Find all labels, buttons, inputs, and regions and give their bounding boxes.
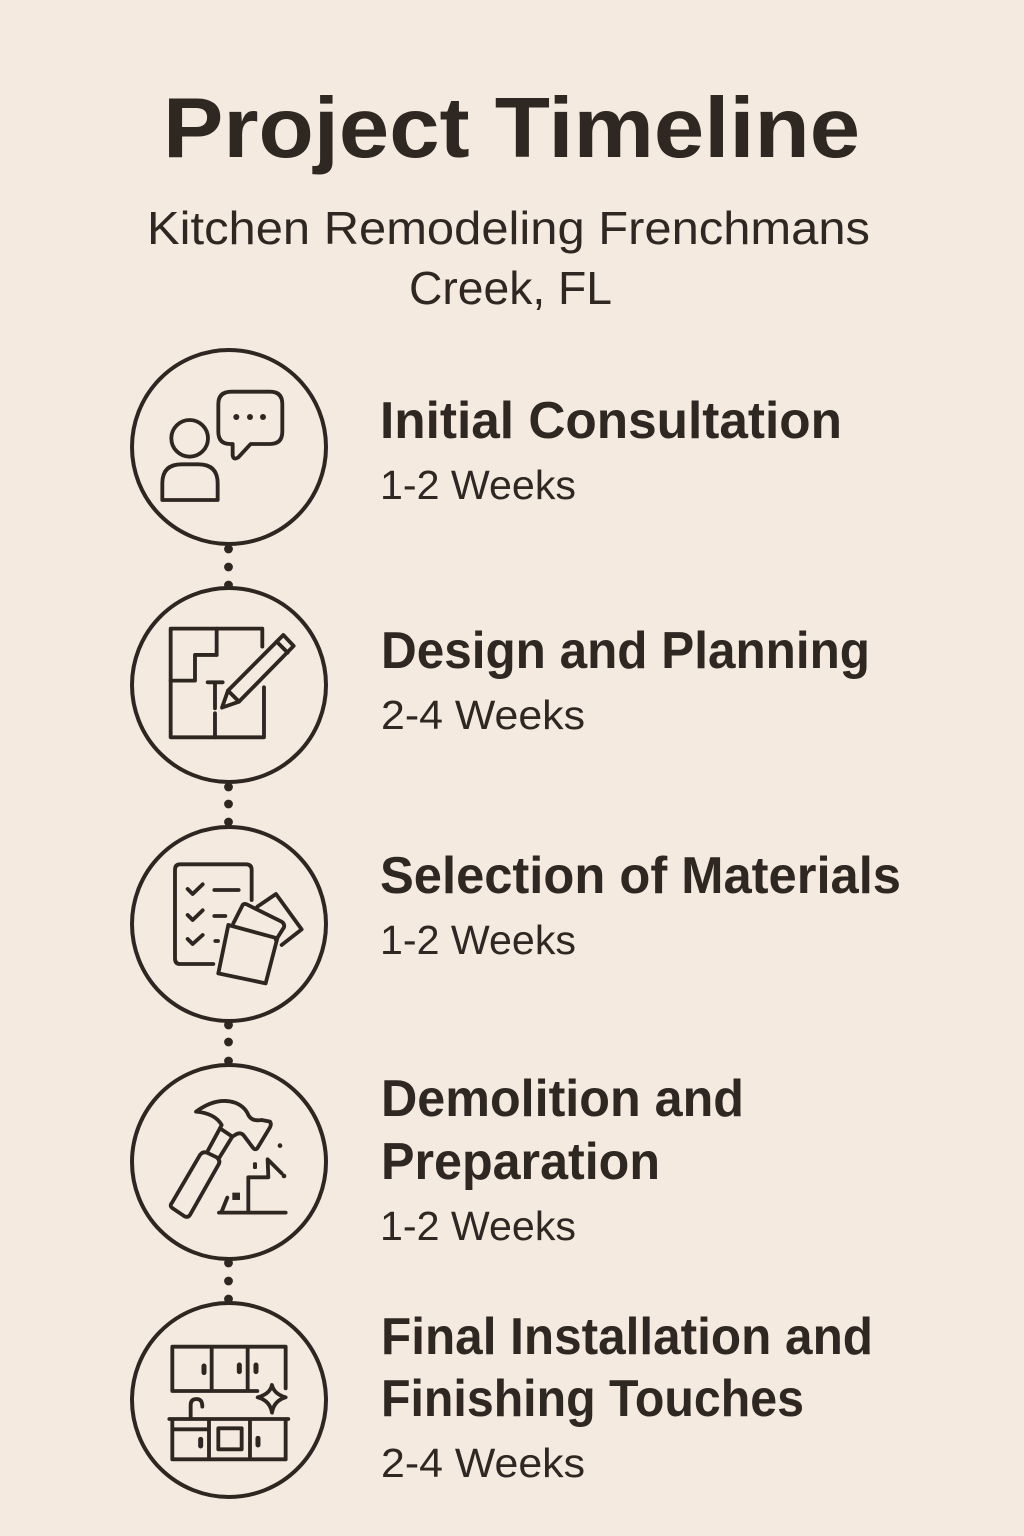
heading: selection of materials: Selection of Materials (380, 847, 901, 905)
subtitle (147, 202, 870, 314)
duration: 2-4 weeks: 2-4 Weeks (381, 1440, 585, 1486)
heading: demolition and preparation: Preparation (381, 1133, 660, 1191)
duration: 1-2 weeks: 1-2 Weeks (380, 917, 576, 963)
step 5: final installation and finishing touches (132, 1303, 873, 1497)
icon: finished kitchen with sparkle (132, 1303, 326, 1497)
icon: floor plan with pencil (132, 588, 326, 782)
duration: 1-2 weeks: 1-2 Weeks (380, 462, 576, 508)
subtitle: Creek, FL (409, 262, 612, 314)
step 1: initial consultation (132, 350, 842, 544)
heading: final installation and finishing touches: Finishing Touches (381, 1370, 804, 1428)
heading: design and planning: Design and Planning (381, 622, 870, 680)
heading: demolition and preparation (381, 1070, 744, 1191)
step 2: design and planning (132, 588, 870, 782)
step 3: selection of materials (132, 827, 901, 1021)
heading: demolition and preparation: Demolition and (381, 1070, 744, 1128)
heading: final installation and finishing touches: Final Installation and (381, 1308, 873, 1366)
icon: hammer and rubble (132, 1065, 326, 1259)
duration: 1-2 weeks: 1-2 Weeks (380, 1203, 576, 1249)
icon: person with speech bubble (132, 350, 326, 544)
timeline connector dots (224, 545, 233, 1303)
heading: final installation and finishing touches (381, 1308, 873, 1428)
title: Project Timeline (163, 81, 860, 176)
step 4: demolition and preparation (132, 1065, 744, 1259)
icon: checklist with material swatches (132, 827, 326, 1021)
duration: 2-4 weeks: 2-4 Weeks (381, 692, 585, 738)
subtitle: Kitchen Remodeling Frenchmans (147, 202, 870, 254)
heading: initial consultation: Initial Consultation (380, 392, 842, 450)
